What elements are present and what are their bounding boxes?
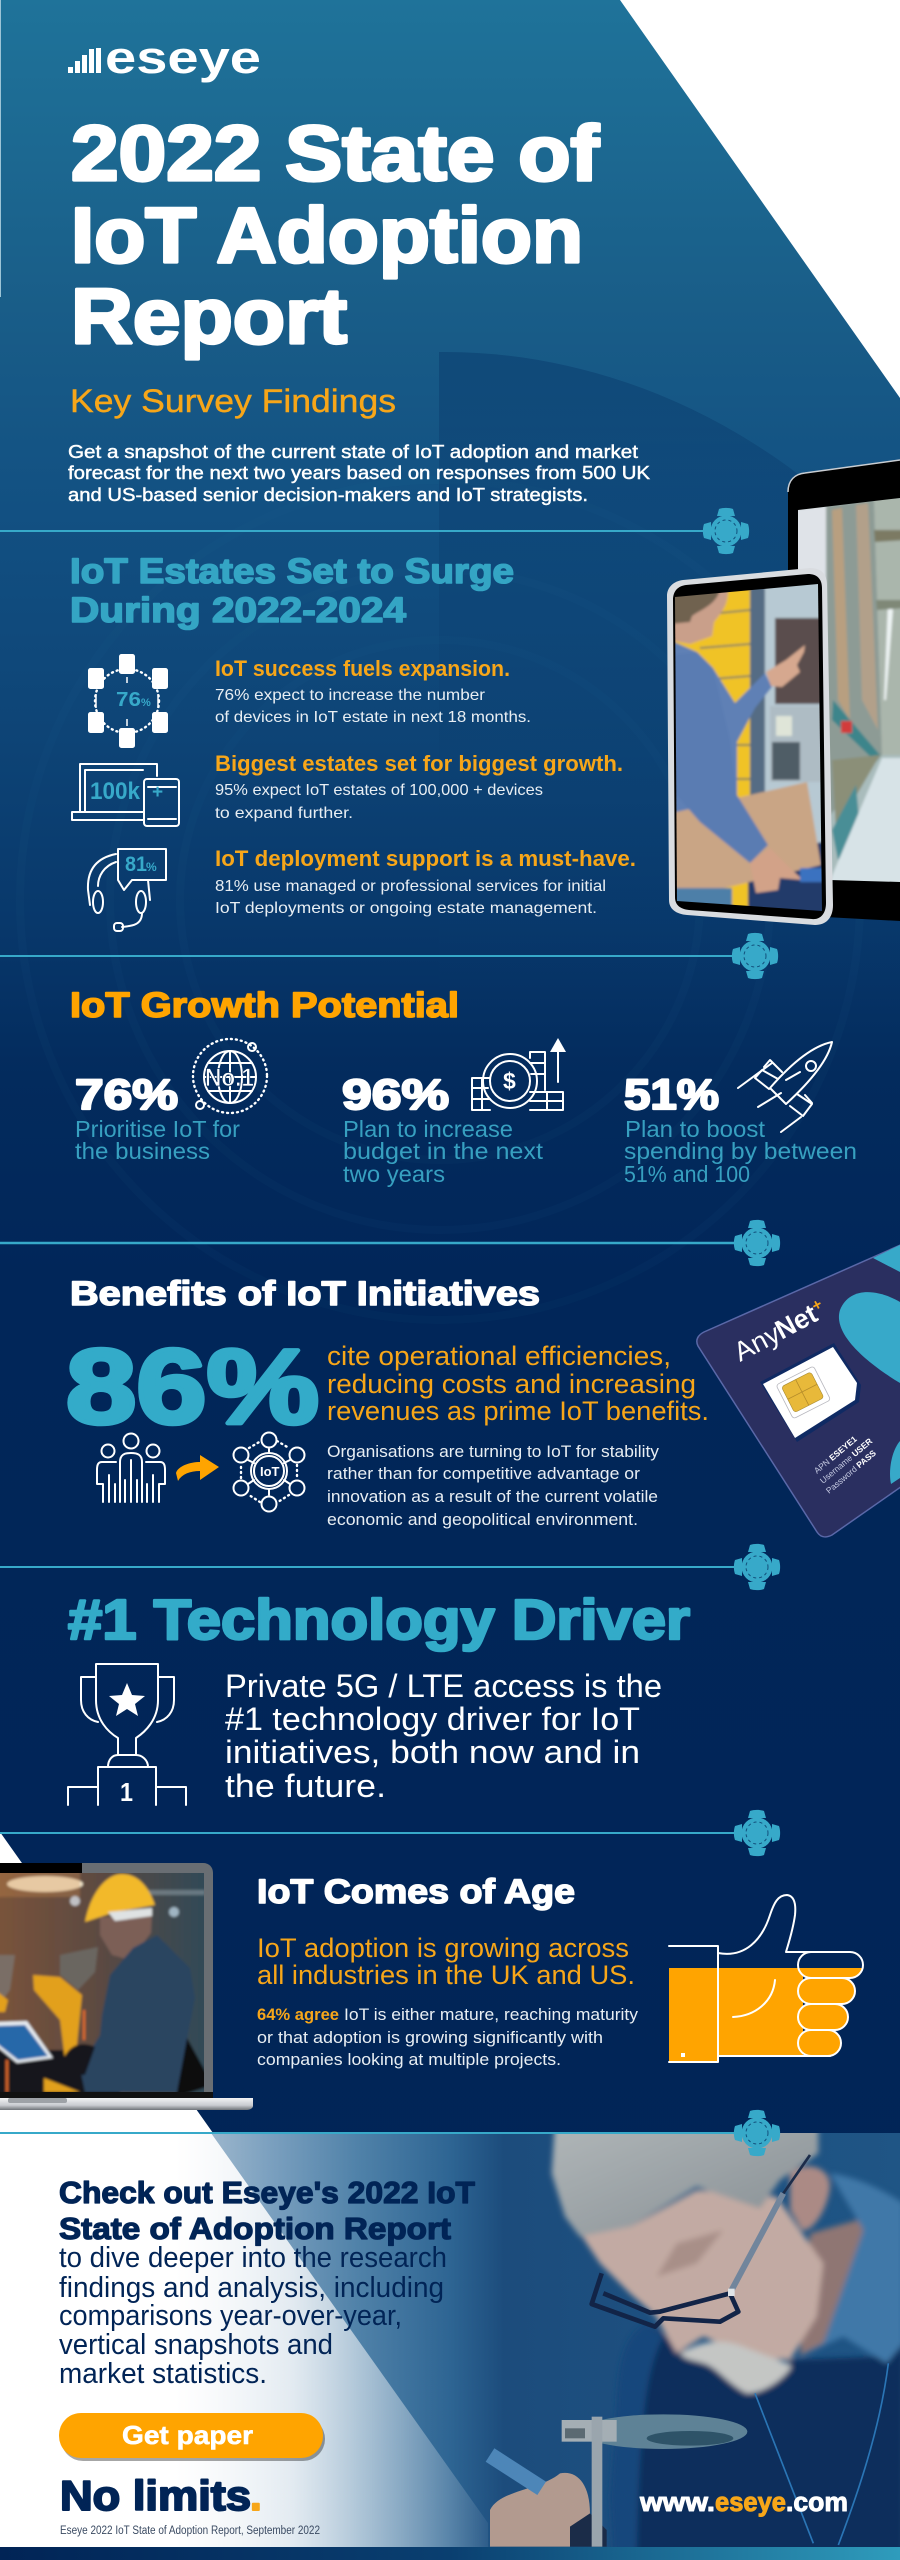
text: dive deeper: to dive deeper into the research	[59, 2242, 447, 2274]
panel: call to action	[0, 2123, 900, 2557]
website url: www.	[639, 2487, 715, 2517]
heading: IoT estates	[70, 552, 514, 630]
website url: eseye	[715, 2487, 786, 2517]
divider 5	[0, 1810, 780, 1856]
icon: globe no.1: No.1	[205, 1064, 254, 1092]
text: dive deeper: findings and analysis, including	[59, 2272, 444, 2304]
panel: IoT growth potential	[70, 986, 857, 1187]
text: dive deeper	[59, 2242, 447, 2390]
panel: #1 technology driver	[68, 1588, 690, 1807]
divider 2	[0, 933, 778, 979]
title: 2022 State of	[71, 109, 600, 197]
text: private 5G: #1 technology driver for IoT	[225, 1701, 640, 1737]
SIM card: AnyNet: Any	[729, 1318, 786, 1367]
icon: trophy: 1	[120, 1777, 133, 1807]
text: 64% agree: companies looking at multiple projects.	[257, 2051, 561, 2069]
logo: eseye	[68, 32, 261, 83]
text: deployment support	[215, 846, 636, 917]
text: deployment support: 81% use managed or professional services for initial	[215, 878, 606, 895]
intro paragraph: and US-based senior decision-makers and IoT strategists.	[68, 485, 588, 505]
text: IoT success fuels expansion: of devices in IoT estate in next 18 months.	[215, 709, 531, 726]
heading: growth potential: IoT Growth Potential	[70, 986, 459, 1025]
text: 64% agree: IoT is either mature, reaching maturity	[344, 2006, 639, 2024]
icon: IoT network: IoT	[260, 1464, 280, 1479]
text: prime IoT benefits: reducing costs and increasing	[327, 1369, 696, 1399]
icon: laptop and tablet 100k: +	[152, 782, 163, 803]
icon: connected devices 76%: %	[141, 697, 151, 709]
icon: laptop and tablet 100k: 100k	[90, 778, 141, 805]
text: organisations paragraph: Organisations are turning to IoT for stability	[327, 1443, 660, 1461]
heading: comes of age: IoT Comes of Age	[257, 1873, 575, 1911]
footer bar	[0, 2547, 900, 2560]
laptop with factory photo	[0, 1863, 253, 2110]
stat: 51%: 51%	[624, 1071, 719, 1119]
white corner top right	[620, 0, 900, 398]
stat: 96%: Plan to increase	[343, 1116, 513, 1142]
text: deployment support: IoT deployment support is a must-have.	[215, 846, 636, 871]
text: IoT success fuels expansion: IoT success fuels expansion.	[215, 656, 510, 681]
stat: 96%: 96%	[342, 1071, 449, 1119]
stat: 51%	[624, 1071, 857, 1187]
heading: benefits: Benefits of IoT Initiatives	[70, 1275, 540, 1313]
divider 1	[0, 508, 749, 554]
heading: check out report	[59, 2175, 475, 2246]
text: dive deeper: comparisons year-over-year,	[59, 2300, 402, 2332]
intro paragraph: Get a snapshot of the current state of IoT adoption and market	[68, 442, 638, 462]
stat: 76%: 76%	[75, 1071, 178, 1119]
icon: thumbs up	[669, 1895, 863, 2062]
text: growing across: all industries in the UK and US.	[257, 1960, 635, 1990]
SIM card: AnyNet: Password PASS	[824, 1448, 878, 1496]
icon: connected devices 76%	[89, 655, 167, 747]
stat: 96%: budget in the next	[343, 1138, 544, 1164]
text: growing across	[257, 1933, 635, 1990]
text: prime IoT benefits: revenues as prime IoT benefits.	[327, 1396, 709, 1426]
SIM card: AnyNet: Net	[770, 1299, 822, 1345]
heading: check out report: State of Adoption Report	[59, 2211, 451, 2246]
text: organisations paragraph	[327, 1443, 660, 1529]
stat: 96%	[342, 1071, 544, 1187]
text: biggest estates: Biggest estates set for biggest growth.	[215, 751, 623, 776]
text: organisations paragraph: rather than for competitive advantage or	[327, 1465, 641, 1483]
text: 64% agree	[257, 2006, 639, 2069]
logo: eseye: eseye	[105, 32, 261, 83]
icon: IoT network	[234, 1432, 304, 1512]
text: biggest estates	[215, 751, 623, 822]
website url: .com	[786, 2487, 848, 2517]
icon: rocket	[738, 1042, 832, 1132]
panel: IoT estates set to surge	[70, 552, 636, 931]
icon: people	[97, 1434, 165, 1502]
button: get paper	[59, 2413, 325, 2461]
white gradient overlay	[0, 2133, 488, 2547]
text: prime IoT benefits: cite operational efficiencies,	[327, 1341, 671, 1371]
white corner lower left	[0, 1832, 213, 2133]
stat: 76%: the business	[75, 1138, 210, 1164]
big stat: 86%: 86%	[66, 1328, 319, 1446]
text: private 5G: initiatives, both now and in	[225, 1734, 640, 1770]
heading: IoT estates: IoT Estates Set to Surge	[70, 552, 514, 591]
panel: benefits of IoT initiatives	[66, 1275, 709, 1529]
heading: #1 technology driver: #1 Technology Driver	[68, 1588, 690, 1652]
heading: check out report: Check out Eseye's 2022 IoT	[59, 2175, 475, 2210]
text: dive deeper: vertical snapshots and	[59, 2329, 333, 2361]
panel: IoT comes of age	[257, 1873, 863, 2069]
stat: 76%	[75, 1071, 240, 1164]
stat: 76%: Prioritise IoT for	[75, 1116, 240, 1142]
icon: globe no.1	[193, 1039, 267, 1113]
stat: 51%: spending by between	[624, 1138, 857, 1164]
divider 3	[0, 1220, 780, 1266]
intro paragraph	[68, 442, 650, 505]
icon: headset with 81% bubble: %	[146, 860, 157, 874]
text: growing across: IoT adoption is growing across	[257, 1933, 629, 1963]
icon: coin stacks with arrow: $	[503, 1068, 516, 1094]
title	[71, 109, 600, 360]
tagline: no limits: No limits	[60, 2472, 251, 2519]
divider 4	[0, 1544, 780, 1590]
divider 6	[0, 2110, 780, 2156]
stat: 51%: 51% and 100	[624, 1161, 750, 1187]
tablet with warehouse photo	[788, 460, 900, 921]
SIM card: AnyNet: Username USER	[818, 1436, 874, 1486]
background circuit shapes	[0, 0, 900, 1320]
text: prime IoT benefits	[327, 1341, 709, 1426]
text: dive deeper: market statistics.	[59, 2358, 267, 2390]
icon: headset with 81% bubble: 81	[125, 853, 147, 876]
icon: trophy	[68, 1664, 186, 1807]
text: IoT success fuels expansion: 76% expect to increase the number	[215, 687, 486, 704]
SIM card: AnyNet: APN ESEYE1	[812, 1434, 859, 1476]
subtitle: key survey findings: Key Survey Findings	[70, 383, 396, 419]
icon: headset with 81% bubble	[88, 849, 166, 931]
icon: connected devices 76%: 76	[116, 689, 141, 711]
text: 64% agree: or that adoption is growing significantly with	[257, 2029, 603, 2047]
stat: 51%: Plan to boost	[625, 1116, 766, 1142]
stat: 96%: two years	[343, 1161, 445, 1187]
text: private 5G: the future.	[225, 1768, 386, 1804]
title: Report	[71, 272, 347, 360]
SIM card: AnyNet: +	[809, 1296, 825, 1315]
phone with locker photo	[667, 568, 833, 925]
icon: laptop and tablet 100k	[72, 764, 179, 826]
SIM card: AnyNet	[697, 1243, 900, 1537]
text: deployment support: IoT deployments or ongoing estate management.	[215, 900, 597, 917]
text: organisations paragraph: innovation as a result of the current volatile	[327, 1488, 658, 1506]
button: get paper: Get paper	[122, 2420, 253, 2450]
text: private 5G	[225, 1668, 662, 1804]
text: organisations paragraph: economic and geopolitical environment.	[327, 1511, 638, 1529]
footnote: Eseye 2022 IoT State of Adoption Report, September 2022	[60, 2525, 320, 2537]
arrow: people to IoT	[176, 1455, 219, 1481]
photo: man with magnifier	[206, 2133, 900, 2547]
intro paragraph: forecast for the next two years based on responses from 500 UK	[68, 463, 650, 483]
website url	[639, 2487, 848, 2517]
icon: coin stacks with arrow	[472, 1038, 566, 1110]
title: IoT Adoption	[71, 191, 583, 279]
text: biggest estates: to expand further.	[215, 805, 353, 822]
tagline: no limits: .	[250, 2472, 262, 2519]
text: 64% agree: 64% agree	[257, 2006, 339, 2024]
text: biggest estates: 95% expect IoT estates of 100,000 + devices	[215, 782, 543, 799]
heading: IoT estates: During 2022-2024	[70, 591, 407, 630]
text: private 5G: Private 5G / LTE access is the	[225, 1668, 662, 1704]
text: IoT success fuels expansion	[215, 656, 531, 726]
